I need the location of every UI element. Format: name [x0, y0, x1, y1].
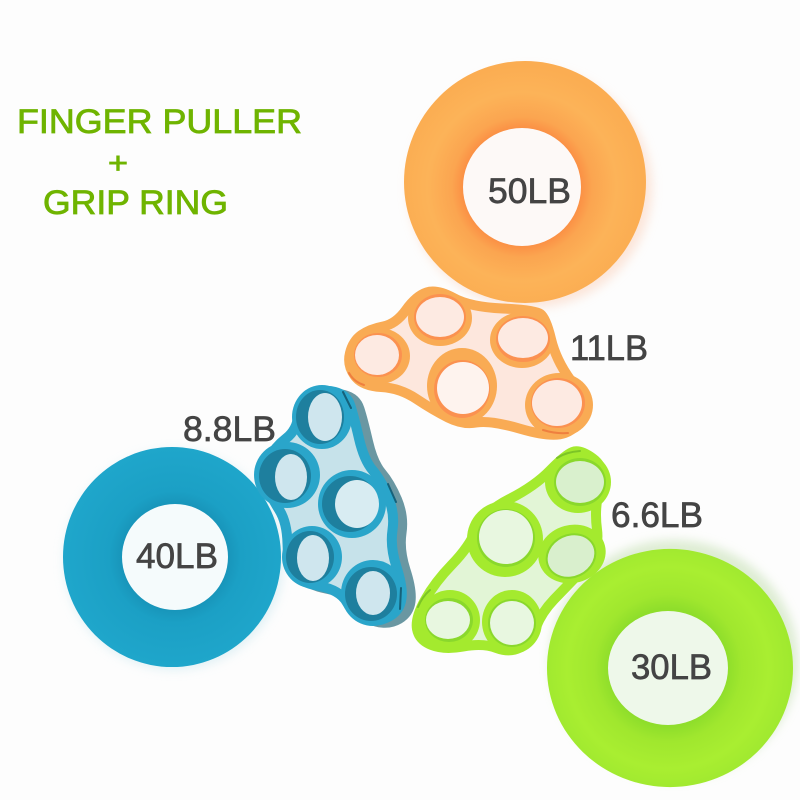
orange finger puller 11LB [348, 290, 593, 437]
title: finger puller + grip ring: GRIP RING [43, 184, 228, 222]
label: 6.6LB: 6.6LB [611, 496, 703, 535]
label: 50LB: 50LB [488, 172, 571, 211]
blue finger puller 8.8LB [254, 385, 411, 626]
label: 40LB: 40LB [136, 537, 218, 576]
label: 8.8LB: 8.8LB [183, 410, 276, 449]
title: finger puller + grip ring [17, 103, 302, 222]
green finger puller 6.6LB [417, 451, 612, 654]
blue grip ring 40LB [63, 447, 284, 670]
title: finger puller + grip ring: + [108, 147, 128, 180]
label: 30LB: 30LB [631, 648, 712, 687]
orange grip ring 50LB [404, 61, 652, 308]
title: finger puller + grip ring: FINGER PULLER [17, 103, 302, 141]
weight labels [136, 172, 712, 687]
label: 11LB: 11LB [570, 329, 648, 368]
green grip ring 30LB [547, 540, 798, 787]
